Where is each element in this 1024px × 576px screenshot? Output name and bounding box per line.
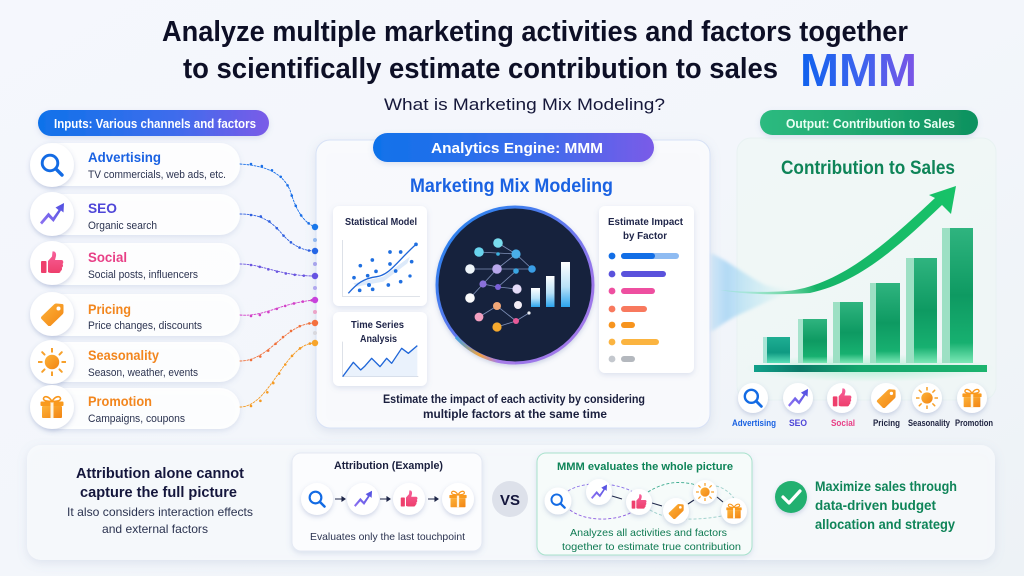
card: statistical model — [333, 206, 427, 306]
input card: advertising: Advertising — [88, 149, 161, 165]
attribution statement — [67, 465, 253, 536]
input card: seasonality: Season, weather, events — [88, 367, 198, 379]
outcome statement: Maximize sales through — [815, 478, 957, 494]
card: time series — [333, 312, 427, 386]
title — [162, 16, 908, 85]
title: to scientifically estimate contribution to sales — [183, 53, 778, 85]
bar chart: contribution — [745, 228, 995, 382]
growth arrow — [720, 186, 956, 294]
subtitle: What is Marketing Mix Modeling? — [384, 95, 665, 114]
card: attribution example — [292, 453, 482, 551]
input card: promotion: Campaigns, coupons — [88, 413, 185, 425]
engine heading pill — [373, 133, 654, 162]
card: MMM whole picture — [537, 453, 752, 555]
MMM heading: MMM — [800, 44, 917, 96]
input card: advertising: TV commercials, web ads, etc. — [88, 169, 226, 181]
flow wave into output — [711, 253, 797, 332]
card: attribution example: Attribution (Example) — [334, 460, 443, 472]
card: MMM whole picture: Analyzes all activities and factors — [570, 527, 727, 539]
scatter plot — [343, 240, 420, 297]
network graph — [465, 238, 536, 332]
factor icon: social: Social — [831, 418, 855, 428]
input card: social — [30, 241, 240, 285]
factor icon: promotion: Promotion — [955, 418, 993, 428]
touchpoint chain — [301, 483, 474, 515]
connected factor network — [544, 479, 747, 524]
input card: pricing: Pricing — [88, 301, 131, 317]
card: MMM whole picture: MMM evaluates the whole picture — [557, 461, 733, 473]
output heading pill — [760, 110, 978, 135]
factor icon: pricing — [871, 383, 901, 428]
input card: SEO — [30, 192, 240, 236]
inputs heading pill: Inputs: Various channels and factors — [54, 116, 256, 131]
input card: SEO: Organic search — [88, 220, 157, 232]
line chart — [343, 342, 418, 377]
input card: seasonality — [30, 340, 240, 384]
factor icon: seasonality — [908, 383, 950, 428]
input card: pricing: Price changes, discounts — [88, 320, 202, 332]
input card: social: Social — [88, 249, 127, 265]
card: attribution example: Evaluates only the last touchpoint — [310, 531, 465, 543]
attribution statement: It also considers interaction effects — [67, 505, 253, 519]
input card: pricing — [30, 292, 240, 336]
card: estimate impact by factor: by Factor — [623, 230, 667, 242]
attribution statement: Attribution alone cannot — [76, 465, 244, 482]
input card: seasonality: Seasonality — [88, 347, 159, 363]
factor icon: SEO: SEO — [789, 418, 807, 428]
title: Analyze multiple marketing activities and factors together — [162, 16, 908, 48]
engine title: Marketing Mix Modeling — [410, 176, 613, 197]
panel: comparison strip — [27, 445, 995, 560]
attribution statement: capture the full picture — [80, 484, 237, 501]
input card: promotion — [30, 385, 240, 429]
input card: SEO: SEO — [88, 200, 117, 216]
VS badge: VS — [500, 492, 520, 509]
card: time series: Time Series — [351, 319, 404, 331]
engine caption: multiple factors at the same time — [423, 407, 607, 421]
panel: output — [711, 110, 996, 428]
engine caption: Estimate the impact of each activity by considering — [383, 392, 645, 406]
central engine badge — [437, 207, 593, 363]
bars glyph — [531, 262, 570, 307]
panel: analytics engine — [312, 133, 710, 428]
input card: advertising — [30, 143, 240, 187]
factor icon: SEO — [783, 383, 813, 428]
connectors: channels into engine — [240, 164, 315, 407]
card: MMM whole picture: together to estimate true contribution — [562, 541, 741, 553]
outcome statement: data-driven budget — [815, 497, 936, 513]
inputs heading pill — [38, 110, 269, 136]
factor icon: seasonality: Seasonality — [908, 418, 950, 428]
engine caption — [383, 392, 645, 421]
factor icon: promotion — [955, 383, 993, 428]
factor icon: advertising — [732, 383, 776, 428]
output title: Contribution to Sales — [781, 158, 955, 179]
factor icon: advertising: Advertising — [732, 418, 776, 428]
output heading pill: Output: Contribution to Sales — [786, 117, 955, 131]
attribution statement: and external factors — [102, 522, 208, 536]
card: estimate impact by factor: Estimate Impact — [608, 216, 683, 228]
card: estimate impact by factor — [599, 206, 694, 373]
icon: check — [775, 481, 807, 513]
factor icon: social — [827, 383, 857, 428]
connector end dots — [312, 224, 318, 346]
card: statistical model: Statistical Model — [345, 216, 417, 228]
outcome statement: allocation and strategy — [815, 516, 955, 532]
factor bar list — [609, 253, 679, 362]
engine heading pill: Analytics Engine: MMM — [431, 140, 603, 157]
factor icon: pricing: Pricing — [873, 418, 900, 428]
input card: promotion: Promotion — [88, 393, 152, 409]
panel: inputs — [30, 110, 269, 429]
input card: social: Social posts, influencers — [88, 269, 198, 281]
card: time series: Analysis — [360, 333, 397, 345]
VS badge — [492, 481, 528, 517]
outcome statement — [775, 478, 957, 532]
